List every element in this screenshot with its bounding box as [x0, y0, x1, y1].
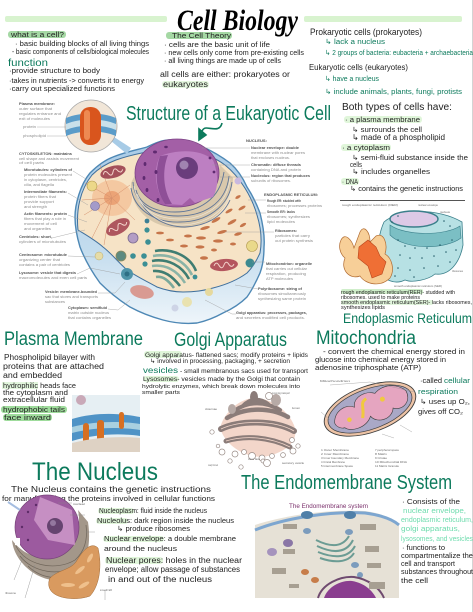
- text block: what is a cell: what is a cell?: [10, 32, 64, 39]
- cytoplasm background: [255, 511, 399, 598]
- text block: endomembrane description: nuclear envelope,: [403, 508, 466, 515]
- golgi stack: [316, 536, 355, 561]
- smooth ER orange mass: [49, 546, 100, 599]
- text block: plasma membrane: [1, 353, 104, 422]
- cell diagram labels: right: containing DNA and protein: [251, 168, 301, 172]
- cell diagram labels: left: Lysosome: vesicle that digests: [19, 271, 76, 275]
- nucleus: [135, 139, 219, 207]
- cell diagram labels: left: provide support: [24, 200, 54, 204]
- diagram: golgi apparatus: secretory vesicle: [282, 461, 304, 465]
- cell diagram labels: left: Actin filaments: protein: [24, 212, 67, 216]
- text block: plasma membrane: hydrophobic tails: [3, 407, 66, 414]
- cell diagram labels: left: Microtubules: cylinders of: [24, 168, 73, 172]
- legend: mitochondrion parts: 11 Matrix Granule: [375, 464, 399, 468]
- text block: nucleus parts: Nucleolus: dark region inside the nucleus: [97, 518, 235, 525]
- text block: plasma membrane: hydrophilic heads face: [3, 383, 76, 390]
- text block: the cell theory: · new cells only come from pre-existing cells: [164, 50, 305, 57]
- ribosome dots: [391, 215, 457, 278]
- text block: rough and smooth ER: [341, 289, 472, 311]
- cell diagram labels: right: ATP molecules: [266, 277, 293, 281]
- cell diagram labels: left: contains a pair of centrioles: [19, 263, 70, 267]
- legend: mitochondrion parts: 8 Matrix: [375, 452, 388, 456]
- cell diagram labels: right: ribosomes; processes proteins: [267, 204, 322, 208]
- peach centrosome glow: [92, 180, 132, 216]
- cell diagram labels: left: and organelles: [24, 227, 51, 231]
- arrow: heading to nucleus: [199, 123, 222, 140]
- cell diagram labels: right: ribosomes; synthesizes: [267, 215, 310, 219]
- text block: mitochondria: - convert the chemical energy stored in: [323, 349, 465, 356]
- cell diagram labels: left: [19, 102, 130, 320]
- text block: nucleus parts: [96, 508, 242, 584]
- cell diagram labels: left: Plasma membrane:: [19, 102, 55, 106]
- text block: plasma membrane: and embedded: [3, 371, 62, 380]
- cell diagram labels: left: Vesicle: membrane-bounded: [45, 290, 97, 294]
- diagram: endoplasmic reticulum: [340, 203, 463, 288]
- cell diagram labels: right: Chromatin: diffuse threads: [251, 163, 301, 167]
- legend: mitochondrion parts: 9 Cristae: [375, 456, 387, 460]
- cell diagram labels: right: Polyribosome: string of: [258, 287, 303, 291]
- text block: endomembrane description: cell and transport: [401, 561, 455, 568]
- diagram: endomembrane system: [255, 504, 399, 598]
- cell diagram labels: right: Ribosomes:: [275, 229, 297, 233]
- endomembrane diagram title: The Endomembrane system: [289, 504, 368, 510]
- cell diagram labels: left: movement of cell: [24, 222, 57, 226]
- legend: mitochondrion parts: 3 Inner boundary Membrane: [321, 456, 359, 460]
- ER and lysosome orange: [301, 569, 309, 575]
- annotation blocks: [272, 524, 385, 589]
- text block: both types of cells have: · a plasma membrane: [345, 117, 420, 124]
- text block: plasma membrane: proteins that are attached: [3, 362, 104, 371]
- text block: endomembrane description: compartmentalize the: [401, 553, 473, 560]
- ER labels: rough endoplasmic reticulum (RER): [342, 203, 398, 207]
- cell diagram labels: left: that contains organelles: [68, 316, 111, 320]
- legend: mitochondrion parts: 10 Mitochondrial DNA: [375, 460, 407, 464]
- cell diagram labels: right: Golgi apparatus: processes, packages,: [236, 311, 307, 315]
- nucleus corner: [324, 581, 376, 598]
- text block: the cell theory: all cells are either: prokaryotes or: [160, 70, 290, 79]
- heading: structure of a eukaryotic cell: Structure of a Eukaryotic Cell: [126, 103, 331, 125]
- legend: mitochondrion parts: 1 Outer Membrane: [321, 448, 349, 452]
- cell diagram labels: right: subunits of ribosomes.: [251, 179, 291, 183]
- diagram: eukaryotic cell: [75, 137, 264, 323]
- text block: endomembrane description: substances throughout: [401, 569, 473, 576]
- text block: nucleus parts: Nuclear envelope: a double membrane: [104, 534, 236, 543]
- cell diagram labels: right: [202, 139, 322, 320]
- cell diagram labels: left: matrix outside nucleus: [68, 311, 109, 315]
- nuclear pores: [143, 146, 215, 202]
- text block: mitochondria: [315, 349, 471, 416]
- nuclear disk: [390, 211, 438, 227]
- smooth ER orange lobes: [340, 229, 392, 284]
- diagram: golgi apparatus: [205, 391, 304, 469]
- legend: mitochondrion parts: 2 Inner Membrane: [321, 452, 349, 456]
- cytoplasm: [78, 149, 261, 292]
- diagram: nucleus: ribosome: [5, 591, 16, 595]
- cell diagram labels: left: protein molecules present: [24, 173, 72, 177]
- text block: mitochondria: glucose into chemical energy stored in: [315, 357, 446, 364]
- cell diagram labels: left: Cytoplasm: semifluid: [68, 306, 107, 310]
- cell diagram labels: left: cilia, and flagella: [24, 183, 54, 187]
- cell diagram labels: left: CYTOSKELETON: maintains: [19, 152, 72, 156]
- text block: the cell theory: eukaryotes: [163, 80, 208, 89]
- text block: both types of cells have: ↳ includes organelles: [352, 168, 431, 176]
- text block: mitochondria: ↳ uses up O₂,: [420, 398, 470, 406]
- cell diagram labels: right: ribosomes simultaneously: [258, 292, 306, 296]
- text block: golgi apparatus: hydrolytic enzymes, which break down molecules into: [142, 384, 300, 390]
- white pore marker: [15, 538, 20, 545]
- text block: golgi apparatus: Lysosomes- vesicles made by the Golgi that contain: [143, 377, 300, 383]
- cell diagram labels: left: cylinders of microtubules: [19, 240, 66, 244]
- cell diagram labels: right: that carries out cellular: [266, 267, 308, 271]
- text block: both types of cells have: [341, 102, 468, 193]
- cell diagram labels: left: protein fibers that: [24, 195, 56, 199]
- rough ER orange sacs: [156, 194, 247, 260]
- text block: endomembrane description: [401, 499, 473, 585]
- inset: plasma membrane close up: [65, 100, 117, 152]
- cell diagram labels: right: membrane with nuclear pores: [251, 151, 305, 155]
- cell diagram labels: right: ENDOPLASMIC RETICULUM:: [264, 193, 318, 197]
- cytoskeleton fibres: [82, 165, 135, 245]
- golgi apparatus: [152, 250, 196, 288]
- text block: both types of cells have: ↳ surrounds the cell: [352, 126, 422, 134]
- diagram: golgi apparatus: cisternae: [205, 407, 217, 411]
- callout arrow: plasma membrane: [111, 137, 131, 154]
- text block: what is a cell: · basic building blocks of all living things: [15, 41, 150, 48]
- text block: mitochondria: cellular: [444, 378, 471, 385]
- legend: mitochondrion parts: [321, 448, 407, 468]
- text block: nucleus parts: in and out of the nucleus: [108, 575, 212, 584]
- text block: golgi apparatus: [142, 351, 308, 396]
- text block: prokaryotic and eukaryotic cells: ↳ lack a nucleus: [325, 38, 386, 46]
- endoplasmic reticulum rings: [131, 165, 233, 228]
- text block: what is a cell: [8, 31, 150, 93]
- cell diagram labels: left: Centrioles: short,: [19, 235, 52, 239]
- cell diagram labels: left: outer surface that: [19, 107, 52, 111]
- cell diagram labels: left: phospholipid: [23, 134, 46, 138]
- text block: plasma membrane: face inward: [4, 415, 51, 422]
- text block: nucleus parts: Nuclear pores: holes in the nuclear: [106, 556, 242, 565]
- text block: endomembrane description: golgi apparatus,: [401, 526, 460, 533]
- text block: prokaryotic and eukaryotic cells: [309, 27, 473, 96]
- text block: the cell theory: [160, 32, 305, 89]
- header green bar: left: [5, 16, 167, 22]
- text block: golgi apparatus: vesicles: [143, 366, 178, 375]
- cell diagram labels: right: respiration, producing: [266, 272, 306, 276]
- text block: both types of cells have: ↳ contains the genetic instructions: [350, 185, 464, 193]
- text block: prokaryotic and eukaryotic cells: ↳ have a nucleus: [325, 75, 379, 83]
- divider: [340, 200, 465, 201]
- text block: the cell theory: · all living things are made up of cells: [164, 58, 282, 65]
- legend: mitochondrion parts: 7 peripheral space: [375, 448, 399, 452]
- diagram: endoplasmic reticulum: nuclear envelope: [418, 203, 438, 207]
- cell diagram labels: left: exit of molecules: [19, 117, 50, 121]
- diagram: endoplasmic reticulum: ribosomes: [452, 269, 463, 273]
- diagram: golgi apparatus: newly formed: [208, 463, 218, 467]
- text block: prokaryotic and eukaryotic cells: Prokaryotic cells (prokaryotes): [310, 27, 422, 37]
- text block: rough and smooth ER: smooth endoplasmic reticulum(SER)- lacks ribosomes,: [341, 300, 472, 306]
- vesicles and lysosomes: [87, 181, 97, 191]
- diagram: nucleus: smooth ER: [100, 588, 113, 592]
- text block: both types of cells have: ↳ semi-fluid substance inside the: [352, 154, 468, 162]
- text block: endomembrane description: endoplasmic reticulum,: [401, 517, 473, 524]
- cell diagram labels: left: in cytoplasm, centrioles,: [24, 178, 67, 182]
- cell diagram labels: right: NUCLEUS:: [246, 139, 267, 143]
- nucleus leader lines: [14, 503, 105, 600]
- text block: rough and smooth ER: rough endoplasmic reticulum(RER)- studded with: [341, 290, 455, 296]
- cell diagram labels: left: sac that stores and transports: [45, 295, 98, 299]
- diagram: golgi apparatus: trans face: [248, 457, 260, 461]
- diagram: nucleus: [5, 495, 113, 600]
- cell diagram labels: left: Intermediate filaments:: [24, 190, 67, 194]
- cell diagram labels: right: lipid molecules: [267, 220, 295, 224]
- text block: golgi apparatus: smaller parts: [142, 390, 180, 396]
- text block: mitochondria: respiration: [418, 389, 458, 396]
- outer cell body: [75, 140, 264, 323]
- cell diagram labels: right: particles that carry: [275, 234, 310, 238]
- title: Cell Biology: [177, 4, 299, 37]
- text block: nucleus intro: [2, 485, 215, 503]
- cell diagram labels: left: regulates entrance and: [19, 112, 61, 116]
- text block: nucleus parts: Nucleoplasm: fluid inside the nucleus: [99, 508, 207, 515]
- cell diagram labels: right: synthesizing same protein: [258, 297, 306, 301]
- diagram: golgi apparatus: incoming transport: [272, 391, 290, 395]
- text block: mitochondria: gives off CO₂: [418, 409, 463, 416]
- mitochondrion lower left: [103, 214, 133, 240]
- diagram: endoplasmic reticulum: nucleus: [440, 210, 450, 214]
- cell diagram labels: right: out protein synthesis: [275, 239, 313, 243]
- text block: plasma membrane: Phospholipid bilayer with: [4, 353, 95, 362]
- text block: endomembrane description: · functions to: [402, 545, 445, 552]
- text block: endomembrane description: the cell: [401, 578, 429, 585]
- legend: mitochondrion parts: 5 Intermembrane Space: [321, 464, 353, 468]
- text block: endomembrane description: · Consists of the: [402, 499, 460, 506]
- text block: nucleus parts: envelope; allow passage of substances: [105, 565, 240, 574]
- cell diagram labels: right: Rough ER: studded with: [267, 199, 301, 203]
- text block: nucleus parts: around the nucleus: [104, 544, 177, 553]
- text block: what is a cell: - basic components of cells/biological molecules: [12, 49, 149, 56]
- cell diagram labels: left: and strength: [24, 205, 47, 209]
- legend: mitochondrion parts: 4 Cristal Membrane: [321, 460, 345, 464]
- nucleus sphere: [15, 495, 79, 559]
- text block: both types of cells have: Both types of cells have:: [342, 102, 452, 113]
- text block: both types of cells have: ↳ made of a phospholipid: [352, 133, 445, 142]
- text block: golgi apparatus: Golgi apparatus- flattened sacs; modify proteins + lipids: [145, 353, 308, 359]
- text block: what is a cell: ·provide structure to body: [9, 68, 101, 75]
- cell diagram labels: left: cell shape and assists movement: [19, 157, 79, 161]
- text block: nucleus intro: The Nucleus contains the genetic instructions: [11, 485, 211, 494]
- diagram: nucleus: nuclear: [73, 502, 85, 506]
- cell diagram labels: left: substances: [45, 300, 65, 304]
- text block: the cell theory: · cells are the basic unit of life: [164, 42, 270, 49]
- rough ER stack: [378, 212, 463, 282]
- heading: golgi apparatus: Golgi Apparatus: [174, 330, 287, 351]
- diagram: mitochondrion: Mitochondrion: [320, 379, 351, 383]
- text block: plasma membrane: the cytoplasm and: [3, 390, 68, 397]
- text block: both types of cells have: · DNA: [342, 179, 358, 186]
- text block: what is a cell: function: [8, 58, 48, 69]
- text block: golgi apparatus: - small membranous sacs used for transport: [180, 369, 308, 375]
- cell diagram labels: right: Nucleolus: region that produces: [251, 174, 310, 178]
- text block: rough and smooth ER: ribosomes. used to make proteins: [341, 295, 421, 301]
- text block: prokaryotic and eukaryotic cells: ↳ include animals, plants, fungi, protists: [325, 88, 463, 96]
- nucleus ER rings: [12, 510, 89, 580]
- text block: nucleus intro: for manufacturing the proteins involved in cellular functions: [2, 494, 215, 503]
- mitochondrion right: [210, 258, 238, 272]
- text block: the cell theory: The Cell Theory: [172, 33, 232, 40]
- heading: mitochondria: Mitochondria: [316, 328, 416, 349]
- cell diagram labels: right: and secretes modified cell products.: [236, 316, 305, 320]
- text block: plasma membrane: extracellular fluid: [3, 397, 65, 404]
- diagram: mitochondrion: [317, 371, 423, 447]
- cell diagram labels: left: organizing center that: [19, 258, 60, 262]
- heading: the nucleus: The Nucleus: [32, 458, 158, 486]
- heading: plasma membrane: Plasma Membrane: [4, 329, 143, 350]
- cell diagram labels: left: of cell parts: [19, 161, 44, 165]
- cell diagram labels: right: Smooth ER: lacks: [267, 210, 295, 214]
- cell diagram labels: left: fibers that play a role in: [24, 217, 66, 221]
- text block: mitochondria: ·called: [420, 378, 442, 385]
- text block: nucleus parts: ↳ produce ribosomes: [117, 525, 191, 533]
- cell diagram labels: left: Centrosome: microtubule: [19, 253, 67, 257]
- cell diagram labels: right: Nuclear envelope: double: [251, 146, 299, 150]
- mitochondrion upper left: [99, 163, 127, 181]
- diagram: plasma membrane bilayer: [72, 395, 140, 452]
- cell diagram labels: left: protein: [23, 125, 36, 129]
- vesicles at the membrane: [301, 511, 313, 519]
- text block: prokaryotic and eukaryotic cells: Eukaryotic cells (eukaryotes): [309, 63, 408, 72]
- cell diagram labels: left: macromolecules and even cell parts: [19, 276, 87, 280]
- text block: what is a cell: ·carry out specialized functions: [9, 86, 116, 93]
- cell diagram labels: right: that encloses nucleus.: [251, 156, 290, 160]
- cell diagram labels: right: Mitochondrion: organelle: [266, 262, 312, 266]
- nucleolus: [176, 157, 198, 179]
- diagram: golgi apparatus: lumen: [292, 406, 300, 410]
- arrow to pore: [8, 502, 20, 510]
- text block: mitochondria: adenosine triphosphate (ATP): [315, 365, 421, 372]
- text block: both types of cells have: cells: [350, 162, 362, 169]
- diagram: endoplasmic reticulum: smooth endoplasmic reticulum (SER): [394, 284, 442, 288]
- text block: what is a cell: ·takes in nutrients -> converts it to energy: [9, 78, 145, 85]
- text block: golgi apparatus: ↳ involved in processing, packaging, + secretion: [150, 358, 290, 365]
- header green bar: right: [304, 16, 462, 22]
- nucleus cutaway: [156, 151, 217, 205]
- text block: both types of cells have: · a cytoplasm: [342, 145, 390, 152]
- text block: rough and smooth ER: synthesizes lipids: [341, 305, 386, 311]
